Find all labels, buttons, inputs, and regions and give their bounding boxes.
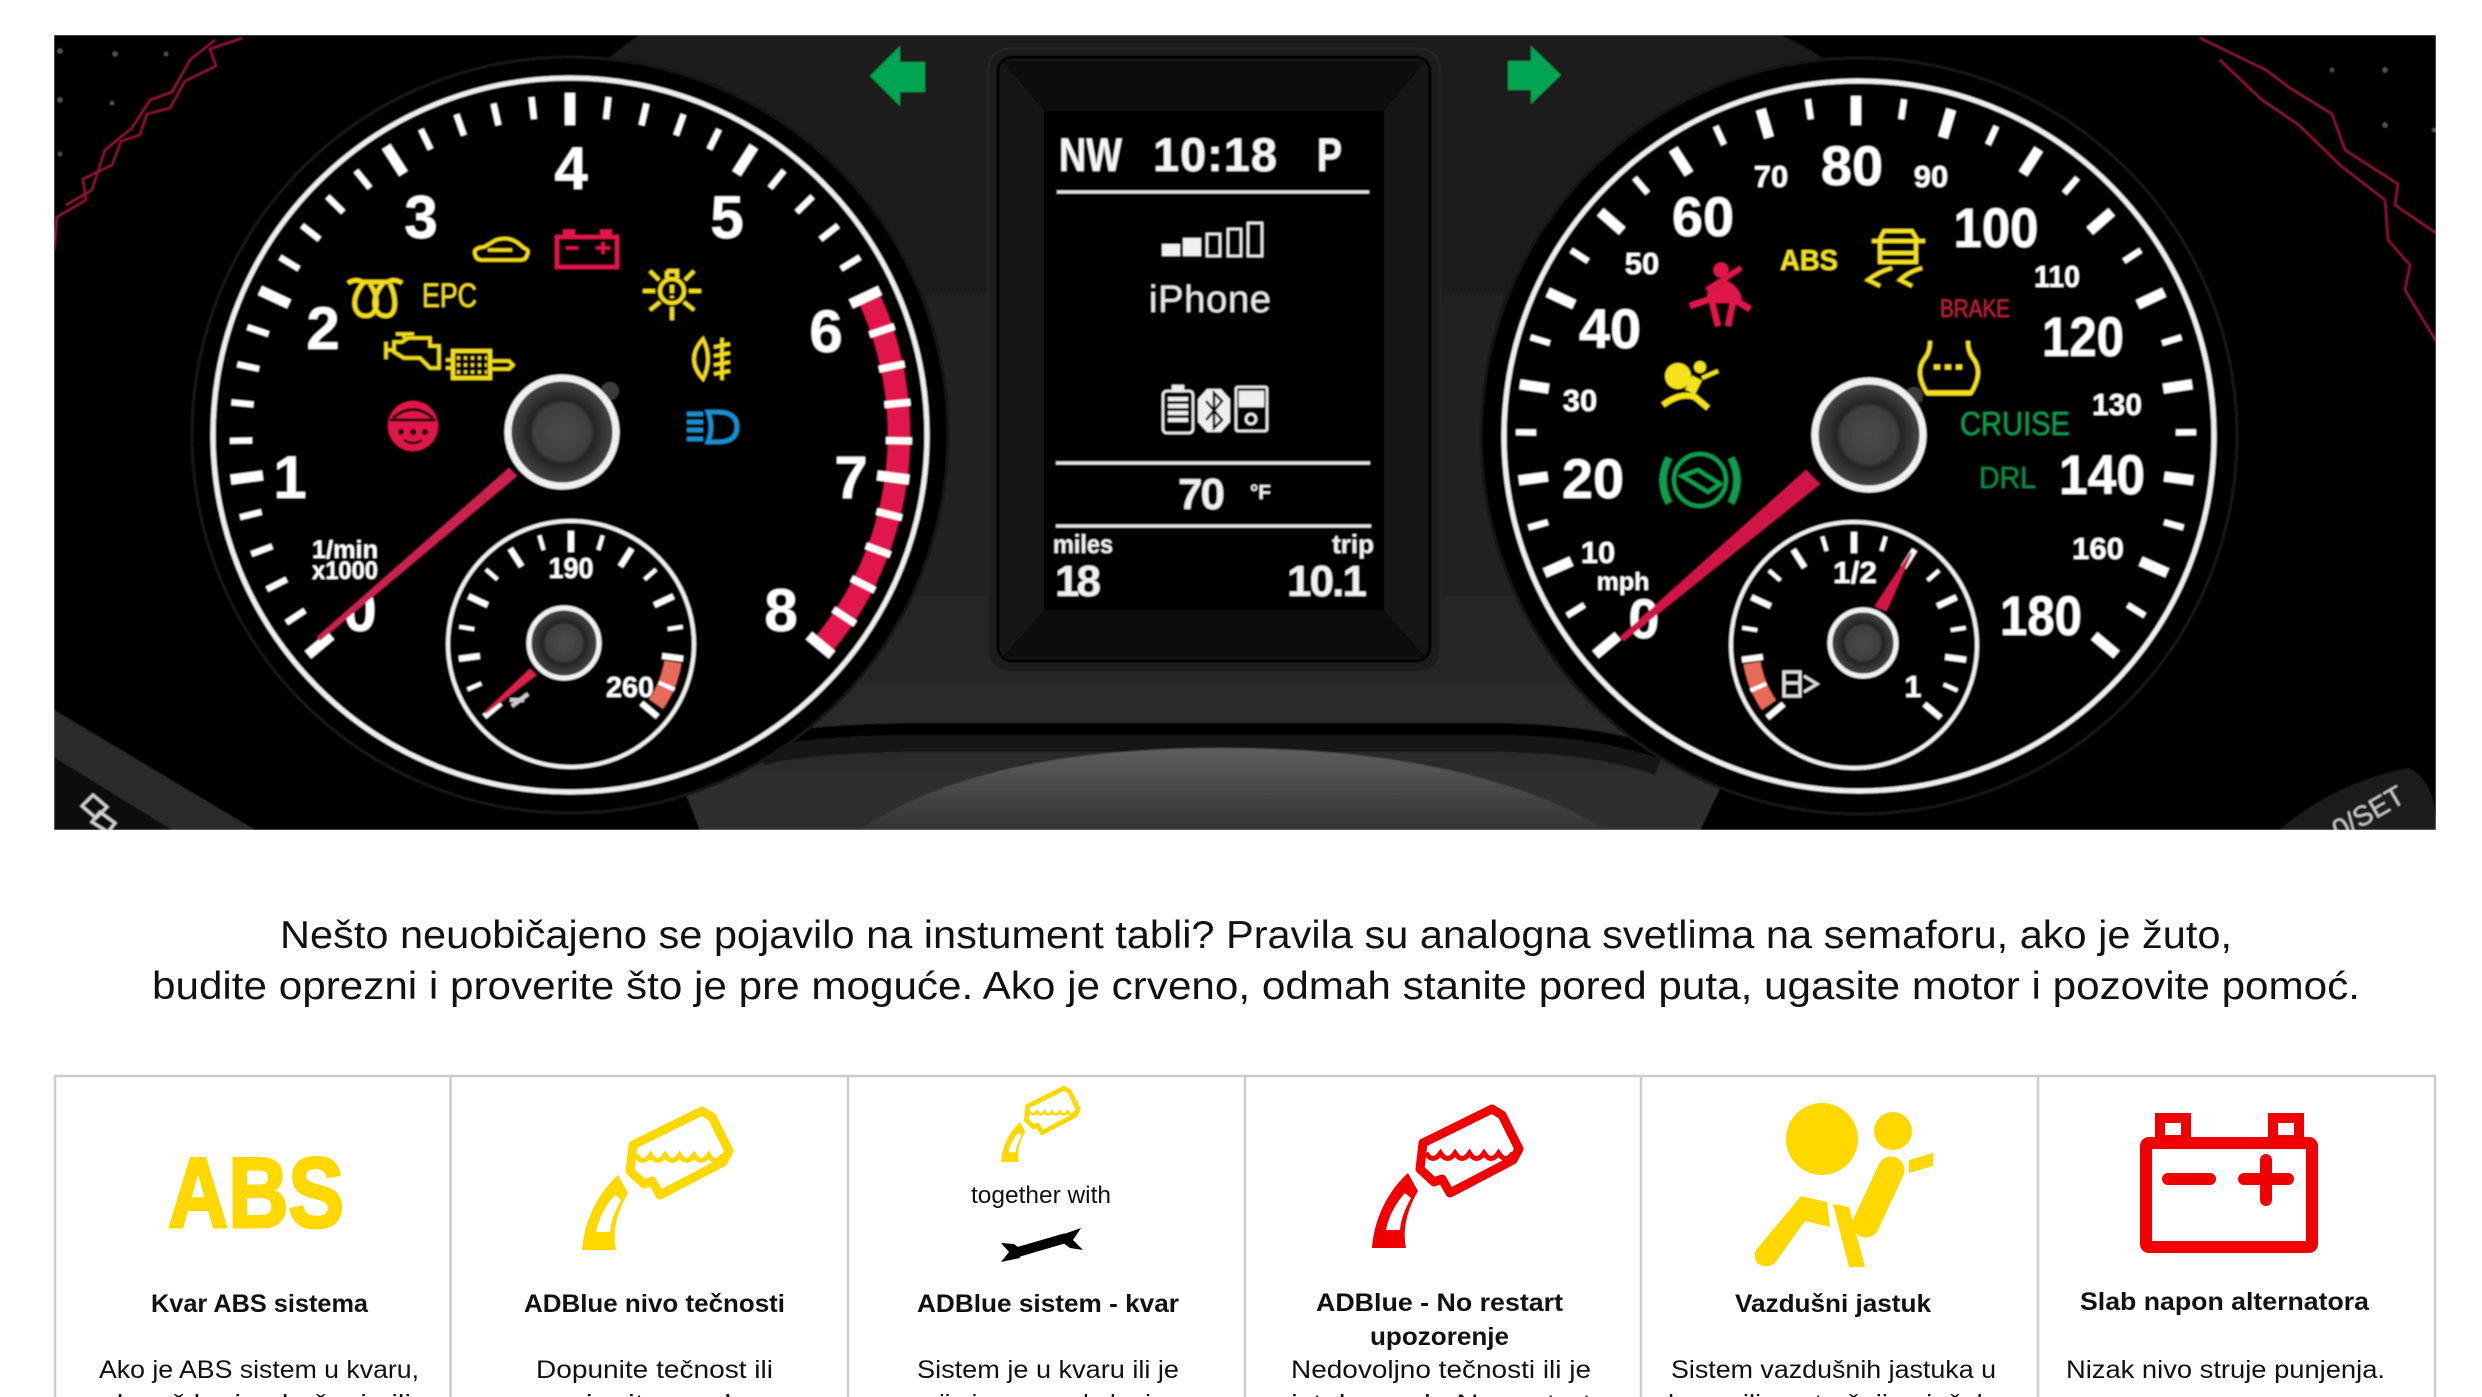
label: BRAKE: BRAKE (1940, 295, 2010, 323)
tachometer unit label: 1/min (312, 536, 378, 564)
icon: bluetooth (1198, 389, 1230, 432)
icon: wrench (1001, 1228, 1083, 1262)
speedometer needle (1620, 470, 1820, 641)
speedometer small numerals: 70 (1754, 159, 1788, 194)
icon: ADBlue bottle red (1372, 1109, 1519, 1248)
icon: red battery (557, 233, 617, 267)
fuel reserve zone (1752, 663, 1769, 705)
tachometer numerals: 5 (710, 184, 744, 251)
body: ADBlue fault description (917, 1356, 1179, 1397)
panel: warning light table (55, 1076, 2435, 1397)
body: ABS description (99, 1356, 419, 1397)
heading: ADBlue - No restart upozorenje (1316, 1289, 1564, 1351)
temperature gauge ticks (459, 531, 683, 717)
icon: fuel pump (1784, 672, 1817, 696)
tachometer numerals: 3 (404, 184, 438, 251)
fuel labels: 1/2 (1833, 555, 1877, 590)
chart: fuel sub gauge (1731, 522, 1977, 768)
body: alternator description: Nizak nivo struje punjenja. (2066, 1356, 2385, 1384)
tachometer numerals (273, 135, 868, 644)
chart: oil temperature sub gauge (448, 521, 694, 767)
decoration: red stitching right (2200, 38, 2436, 341)
fuel hub (1830, 610, 1896, 676)
body: airbag description: Sistem vazdušnih jastuka u (1671, 1356, 1996, 1384)
speedometer small numerals: 50 (1625, 246, 1659, 281)
speedometer large numerals: 100 (1954, 196, 2038, 259)
text: together with: together with (971, 1182, 1111, 1209)
icon: traction control skid car (1868, 231, 1925, 286)
label: SET button: 0/SET (2327, 780, 2410, 845)
temperature red zone (656, 662, 673, 704)
icon: green right turn arrow (1508, 46, 1561, 104)
temperature needle (485, 670, 535, 713)
icon: signal bars (1162, 223, 1262, 256)
speedometer large numerals: 20 (1562, 447, 1624, 510)
card: airbag (1668, 1103, 1998, 1397)
tachometer minor ticks (230, 97, 912, 624)
text block: introduction (152, 914, 2360, 1008)
icon: glow plug coil (348, 280, 402, 316)
tachometer hub (508, 378, 619, 486)
display heading and time (1059, 128, 1342, 181)
speedometer large numerals (1562, 134, 2145, 650)
body: ADBlue level description: Dopunite tečnost ili (536, 1356, 773, 1384)
tachometer unit label: x1000 (312, 557, 378, 585)
icon: red battery large (2146, 1118, 2312, 1247)
tachometer numerals: 0 (343, 577, 377, 644)
body: no restart description: Nedovoljno tečnosti ili je (1291, 1356, 1591, 1384)
trip readouts: miles (1053, 529, 1113, 559)
heading: Slab napon alternatora: Slab napon alternatora (2080, 1288, 2370, 1316)
icon: car outline warning (475, 239, 528, 260)
label: DRL: DRL (1979, 460, 2036, 495)
tachometer numerals: 4 (554, 135, 588, 202)
body: ADBlue fault description: Sistem je u kvaru ili je (917, 1356, 1179, 1384)
card: alternator (2066, 1118, 2385, 1384)
icon: bulb failure warning (643, 271, 701, 320)
icon: rear fog lamp (694, 338, 730, 380)
temperature symbol (510, 694, 528, 706)
body: airbag description (1668, 1356, 1998, 1397)
speedometer small numerals: 30 (1563, 383, 1597, 418)
heading: Vazdušni jastuk: Vazdušni jastuk (1735, 1290, 1931, 1318)
icon: media player (1236, 387, 1267, 431)
speedometer large numerals: 60 (1672, 185, 1734, 248)
tachometer unit label (311, 538, 378, 580)
temperature labels (548, 553, 654, 704)
heading: ADBlue sistem - kvar: ADBlue sistem - kvar (917, 1290, 1179, 1318)
speedometer small numerals: 10 (1581, 535, 1615, 570)
temperature labels: 190 (548, 553, 594, 585)
speedometer large numerals: 120 (2042, 305, 2124, 368)
icon: green left turn arrow (870, 46, 925, 106)
display heading and time: 10:18 (1153, 128, 1277, 181)
icon: green parking brake (1663, 454, 1737, 506)
trip readouts: 10.1 (1287, 557, 1367, 606)
outside temperature: °F (1250, 482, 1271, 504)
speedometer large numerals: 80 (1821, 134, 1883, 197)
tachometer numerals: 2 (306, 295, 340, 362)
card: ADBlue level (524, 1111, 785, 1397)
icon: red seatbelt warning (1690, 263, 1750, 326)
tachometer numerals: 1 (273, 444, 307, 511)
fuel needle (1876, 553, 1911, 610)
icon: phone battery (1163, 386, 1193, 433)
display heading and time: P (1317, 128, 1342, 181)
label: CRUISE: CRUISE (1960, 405, 2070, 442)
icon: particulate filter (446, 351, 513, 378)
outside temperature (1178, 470, 1271, 519)
trip readouts: trip (1332, 529, 1374, 559)
speedometer small numerals: 90 (1914, 159, 1948, 194)
fuel labels: 1 (1904, 669, 1922, 704)
heading: ADBlue - No restart upozorenje: ADBlue - No restart (1316, 1289, 1564, 1317)
chart: tachometer gauge (209, 74, 931, 796)
device name: iPhone (1149, 279, 1271, 321)
decoration: red stitching left (54, 38, 242, 250)
tachometer zero mask (306, 587, 370, 614)
heading: Kvar ABS sistema: Kvar ABS sistema (151, 1290, 369, 1318)
text block: introduction: budite oprezni i proverite što je pre moguće. Ako je crveno, odmah stanite pored puta, ugasite motor i pozovite pomoć. (152, 965, 2360, 1008)
card: ADBlue no restart (1291, 1109, 1591, 1397)
speedometer hub (1815, 381, 1923, 489)
tachometer red zone (816, 295, 912, 650)
icon: engine warning (386, 334, 439, 368)
tachometer numerals: 8 (764, 577, 798, 644)
speedometer large numerals: 0 (1628, 587, 1660, 650)
icon: small airbag warning (1663, 361, 1718, 408)
body: ADBlue level description (536, 1356, 773, 1397)
icon: red steering wheel (388, 401, 438, 451)
icon: high beam (687, 412, 737, 442)
panel: instrument cluster photo (54, 0, 2436, 872)
heading: ADBlue - No restart upozorenje: upozorenje (1370, 1323, 1509, 1351)
temperature hub (529, 608, 599, 678)
body: no restart description (1291, 1356, 1591, 1397)
speedometer large numerals: 40 (1579, 297, 1641, 360)
speedometer large numerals: 180 (2000, 584, 2082, 647)
speedometer small numerals: 130 (2092, 387, 2142, 422)
display heading and time: NW (1059, 128, 1123, 181)
body: ABS description: Ako je ABS sistem u kvaru, (99, 1356, 419, 1384)
text block: introduction: Nešto neuobičajeno se pojavilo na instument tabli? Pravila su analogna svetlima na semaforu, ako je žuto, (280, 914, 2232, 957)
tachometer numerals: 6 (809, 298, 843, 365)
icon: airbag warning (1755, 1103, 1933, 1267)
tachometer major ticks (231, 93, 909, 655)
tachometer needle (317, 468, 517, 641)
trip readouts: 18 (1055, 557, 1101, 606)
speedometer thick ticks (1519, 96, 2193, 655)
icon: ADBlue bottle small (1001, 1088, 1078, 1162)
trip readouts (1053, 529, 1374, 606)
outside temperature: 70 (1178, 470, 1225, 519)
fuel labels (1833, 555, 1922, 704)
speedometer unit label: mph (1597, 568, 1649, 596)
tachometer numerals: 7 (834, 444, 868, 511)
speedometer small numerals: 110 (2034, 259, 2080, 294)
icon: ABS: ABS (168, 1137, 344, 1248)
heading: ADBlue nivo tečnosti: ADBlue nivo tečnosti (524, 1290, 785, 1318)
icon: bottom-left button symbol (82, 795, 115, 832)
card: ADBlue fault (917, 1088, 1179, 1397)
label: EPC: EPC (422, 277, 477, 315)
label: ABS warning: ABS (1780, 245, 1838, 277)
speedometer small numerals (1563, 159, 2142, 570)
fuel gauge ticks (1742, 532, 1966, 718)
card: ABS (99, 1137, 419, 1397)
panel: central trip display (988, 49, 1440, 672)
decoration: perforation dots (58, 48, 2436, 156)
icon: ADBlue bottle yellow (582, 1111, 729, 1250)
chart: speedometer gauge (1504, 81, 2214, 791)
temperature labels: 260 (606, 672, 654, 704)
speedometer large numerals: 140 (2059, 443, 2145, 506)
speedometer thin ticks (1516, 99, 2196, 616)
icon: tire pressure warning (1920, 341, 1978, 393)
speedometer small numerals: 160 (2072, 531, 2124, 566)
